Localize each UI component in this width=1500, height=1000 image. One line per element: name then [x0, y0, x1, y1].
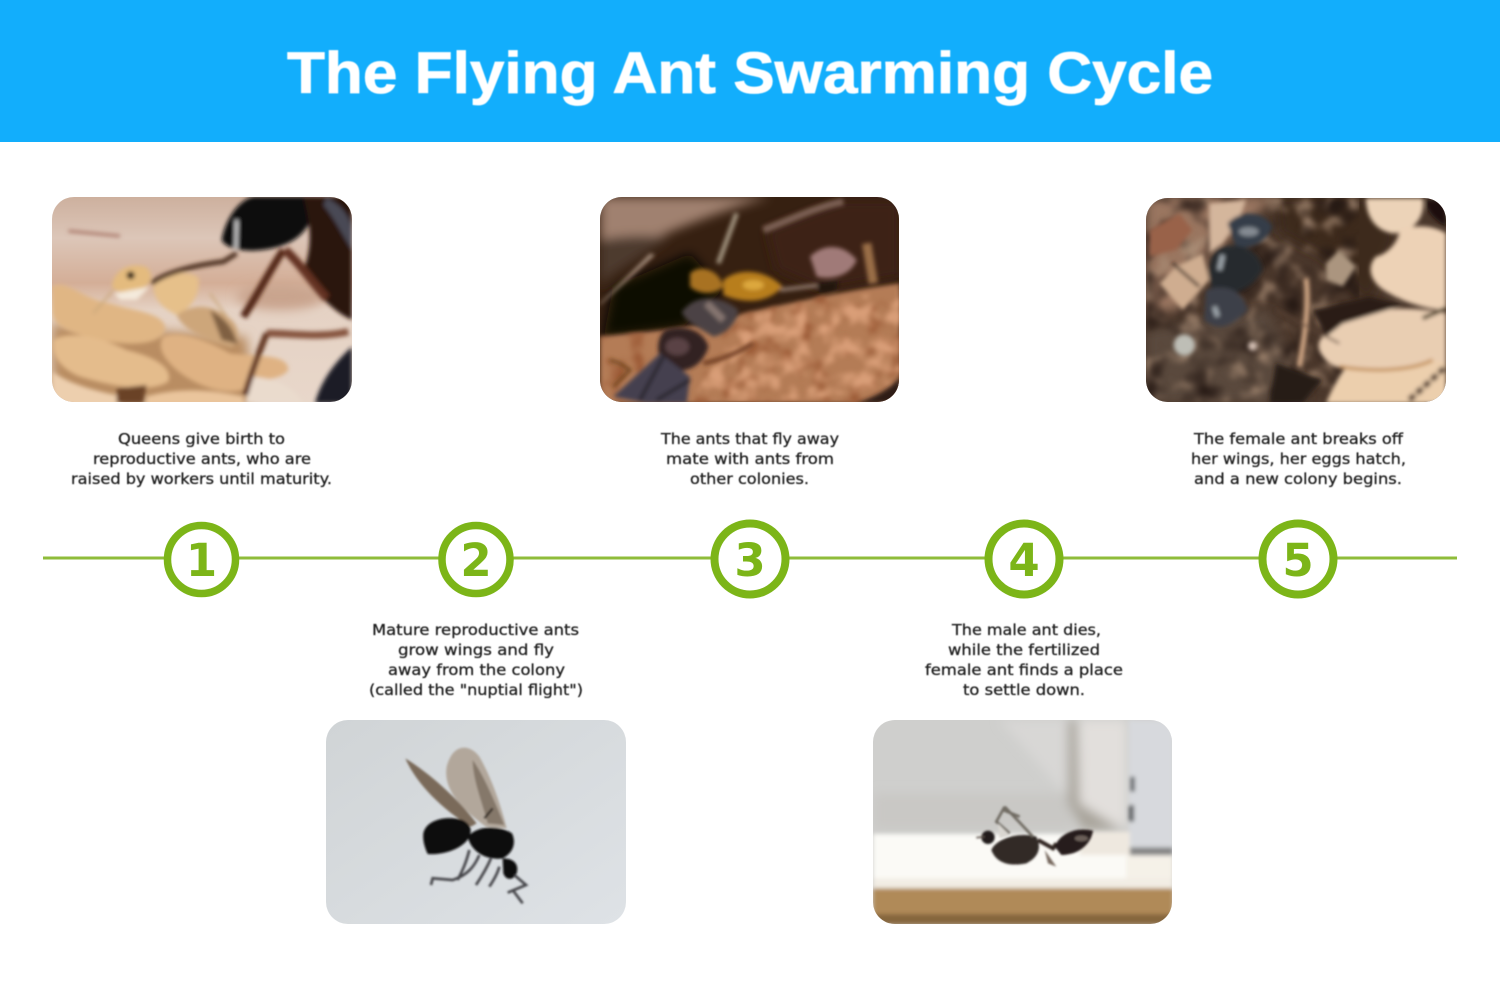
step 2 text: grow wings and fly	[398, 641, 554, 659]
step 5 marker: 5	[1282, 534, 1314, 587]
step 4 text: The male ant dies,	[951, 621, 1101, 639]
step 5 text	[1191, 430, 1406, 488]
step 1 marker: 1	[186, 534, 217, 587]
step 1 text: reproductive ants, who are	[93, 450, 311, 468]
step 4 text: while the fertilized	[948, 641, 1100, 659]
step 3 text	[660, 430, 839, 488]
photo 2: ants mating on bark	[600, 197, 900, 403]
header banner	[0, 0, 1500, 142]
step 1 text: raised by workers until maturity.	[71, 470, 332, 488]
photo 3: wingless queen with eggs	[1146, 197, 1446, 403]
step 3 text: mate with ants from	[666, 450, 834, 468]
step 4 text: female ant finds a place	[925, 661, 1123, 679]
debris texture	[1146, 198, 1359, 402]
step 1 text	[71, 430, 332, 488]
step 3 marker	[714, 524, 786, 594]
photo 4: winged ant in flight	[326, 720, 626, 924]
step 4 text: to settle down.	[963, 681, 1085, 699]
step 1 text: Queens give birth to	[118, 430, 285, 448]
step 2 text: Mature reproductive ants	[372, 621, 579, 639]
step 2 marker: 2	[460, 534, 492, 587]
step 5 text: her wings, her eggs hatch,	[1191, 450, 1406, 468]
step 2 text: (called the "nuptial flight")	[369, 681, 583, 699]
step 2 text	[369, 621, 583, 699]
step 3 text: The ants that fly away	[660, 430, 839, 448]
step 4 marker: 4	[1008, 534, 1040, 587]
step 2 text: away from the colony	[388, 661, 565, 679]
step 4 text	[925, 621, 1123, 699]
bark texture	[605, 294, 898, 402]
step 1 marker	[168, 526, 236, 594]
step 3 marker: 3	[734, 534, 766, 587]
step 5 text: and a new colony begins.	[1194, 470, 1402, 488]
step 3 text: other colonies.	[690, 470, 809, 488]
step 5 text: The female ant breaks off	[1193, 430, 1403, 448]
step 5 marker	[1262, 524, 1334, 594]
title: The Flying Ant Swarming Cycle	[287, 41, 1213, 106]
timeline line	[43, 556, 1457, 560]
step 4 marker	[988, 524, 1060, 594]
photo 1: queen ant with larvae	[52, 197, 352, 407]
photo 5: ant on window sill	[873, 720, 1174, 925]
step 2 marker	[442, 526, 510, 594]
